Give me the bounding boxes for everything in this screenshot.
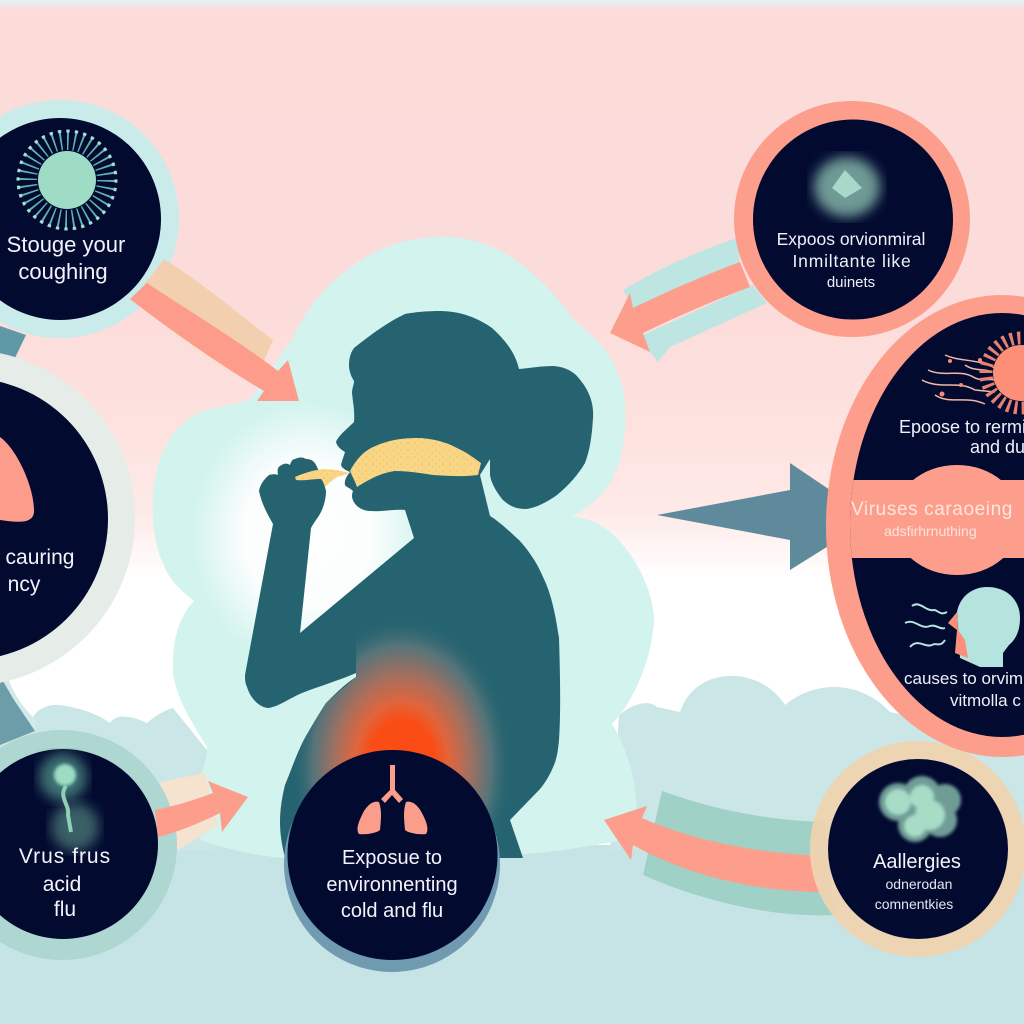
icon: allergy cloud xyxy=(879,776,961,842)
text: viruses band: adsfirhrnuthing xyxy=(884,523,977,539)
arrow band: bottom left xyxy=(160,773,218,855)
arrow: top left to figure xyxy=(130,259,299,401)
text: cauring ncy: cauring xyxy=(6,546,74,569)
teal connector top xyxy=(0,326,26,378)
arrow: top right to figure xyxy=(610,238,767,362)
text: allergy caption: odnerodan xyxy=(886,876,952,892)
icon: head with breath waves xyxy=(905,587,1020,667)
icon: virus strand xyxy=(39,753,99,851)
text: cauring ncy: ncy xyxy=(8,573,41,596)
text: exposure irritants: Inmiltante like xyxy=(792,251,912,271)
icon: virus xyxy=(18,131,116,229)
text: exposure irritants: duinets xyxy=(827,274,875,291)
panel: left middle circle xyxy=(0,350,135,686)
icon: coral virus with trails xyxy=(922,338,1024,408)
text: causes: vitmolla c xyxy=(950,691,1021,710)
panel: bottom right circle xyxy=(810,741,1024,957)
woman silhouette xyxy=(245,311,593,915)
text: virus frus acid flu: acid xyxy=(43,873,81,896)
body and arm xyxy=(245,311,593,858)
text: exposure to environment: Exposue to xyxy=(342,847,442,869)
panel: top right circle xyxy=(734,101,970,337)
panel: bottom center circle xyxy=(284,750,500,972)
background clouds xyxy=(0,676,1024,850)
panel: bottom left circle xyxy=(0,730,177,960)
teal connector bottom xyxy=(0,664,36,745)
white glow behind figure xyxy=(190,400,426,670)
text: exposure irritants: Expoos orvionmiral xyxy=(777,229,925,249)
text: allergy caption: comnentkies xyxy=(875,896,953,912)
belly heat glow xyxy=(299,627,505,826)
central cloud backdrop xyxy=(153,237,654,858)
text: virus frus acid flu: Vrus frus xyxy=(19,845,111,868)
arrow: steel blue from capsule xyxy=(657,463,830,570)
text: virus frus acid flu: flu xyxy=(54,898,76,921)
icon: blurred particle xyxy=(814,157,880,217)
text: stouge your coughing: Stouge your xyxy=(7,232,125,257)
scarf xyxy=(350,438,481,487)
text: allergies: Aallergies xyxy=(873,851,961,873)
arrow: bottom left to figure xyxy=(155,781,248,837)
icon: lungs xyxy=(358,765,427,834)
panel: top left circle xyxy=(0,100,179,338)
text: exposure to environment: environnenting xyxy=(326,874,458,896)
cough tongue xyxy=(295,469,350,487)
icon: lung xyxy=(0,437,34,522)
text: stouge your coughing: coughing xyxy=(18,259,108,284)
panel: right capsule xyxy=(826,295,1024,757)
arrow band: bottom right xyxy=(643,791,835,915)
text: exposure to environment: cold and flu xyxy=(341,900,443,922)
text: exposure to: Epoose to rermi xyxy=(899,417,1024,437)
arrow: bottom right to figure xyxy=(604,806,824,892)
middle band xyxy=(840,465,1024,575)
text: viruses band: Viruses caraoeing xyxy=(851,499,1013,520)
